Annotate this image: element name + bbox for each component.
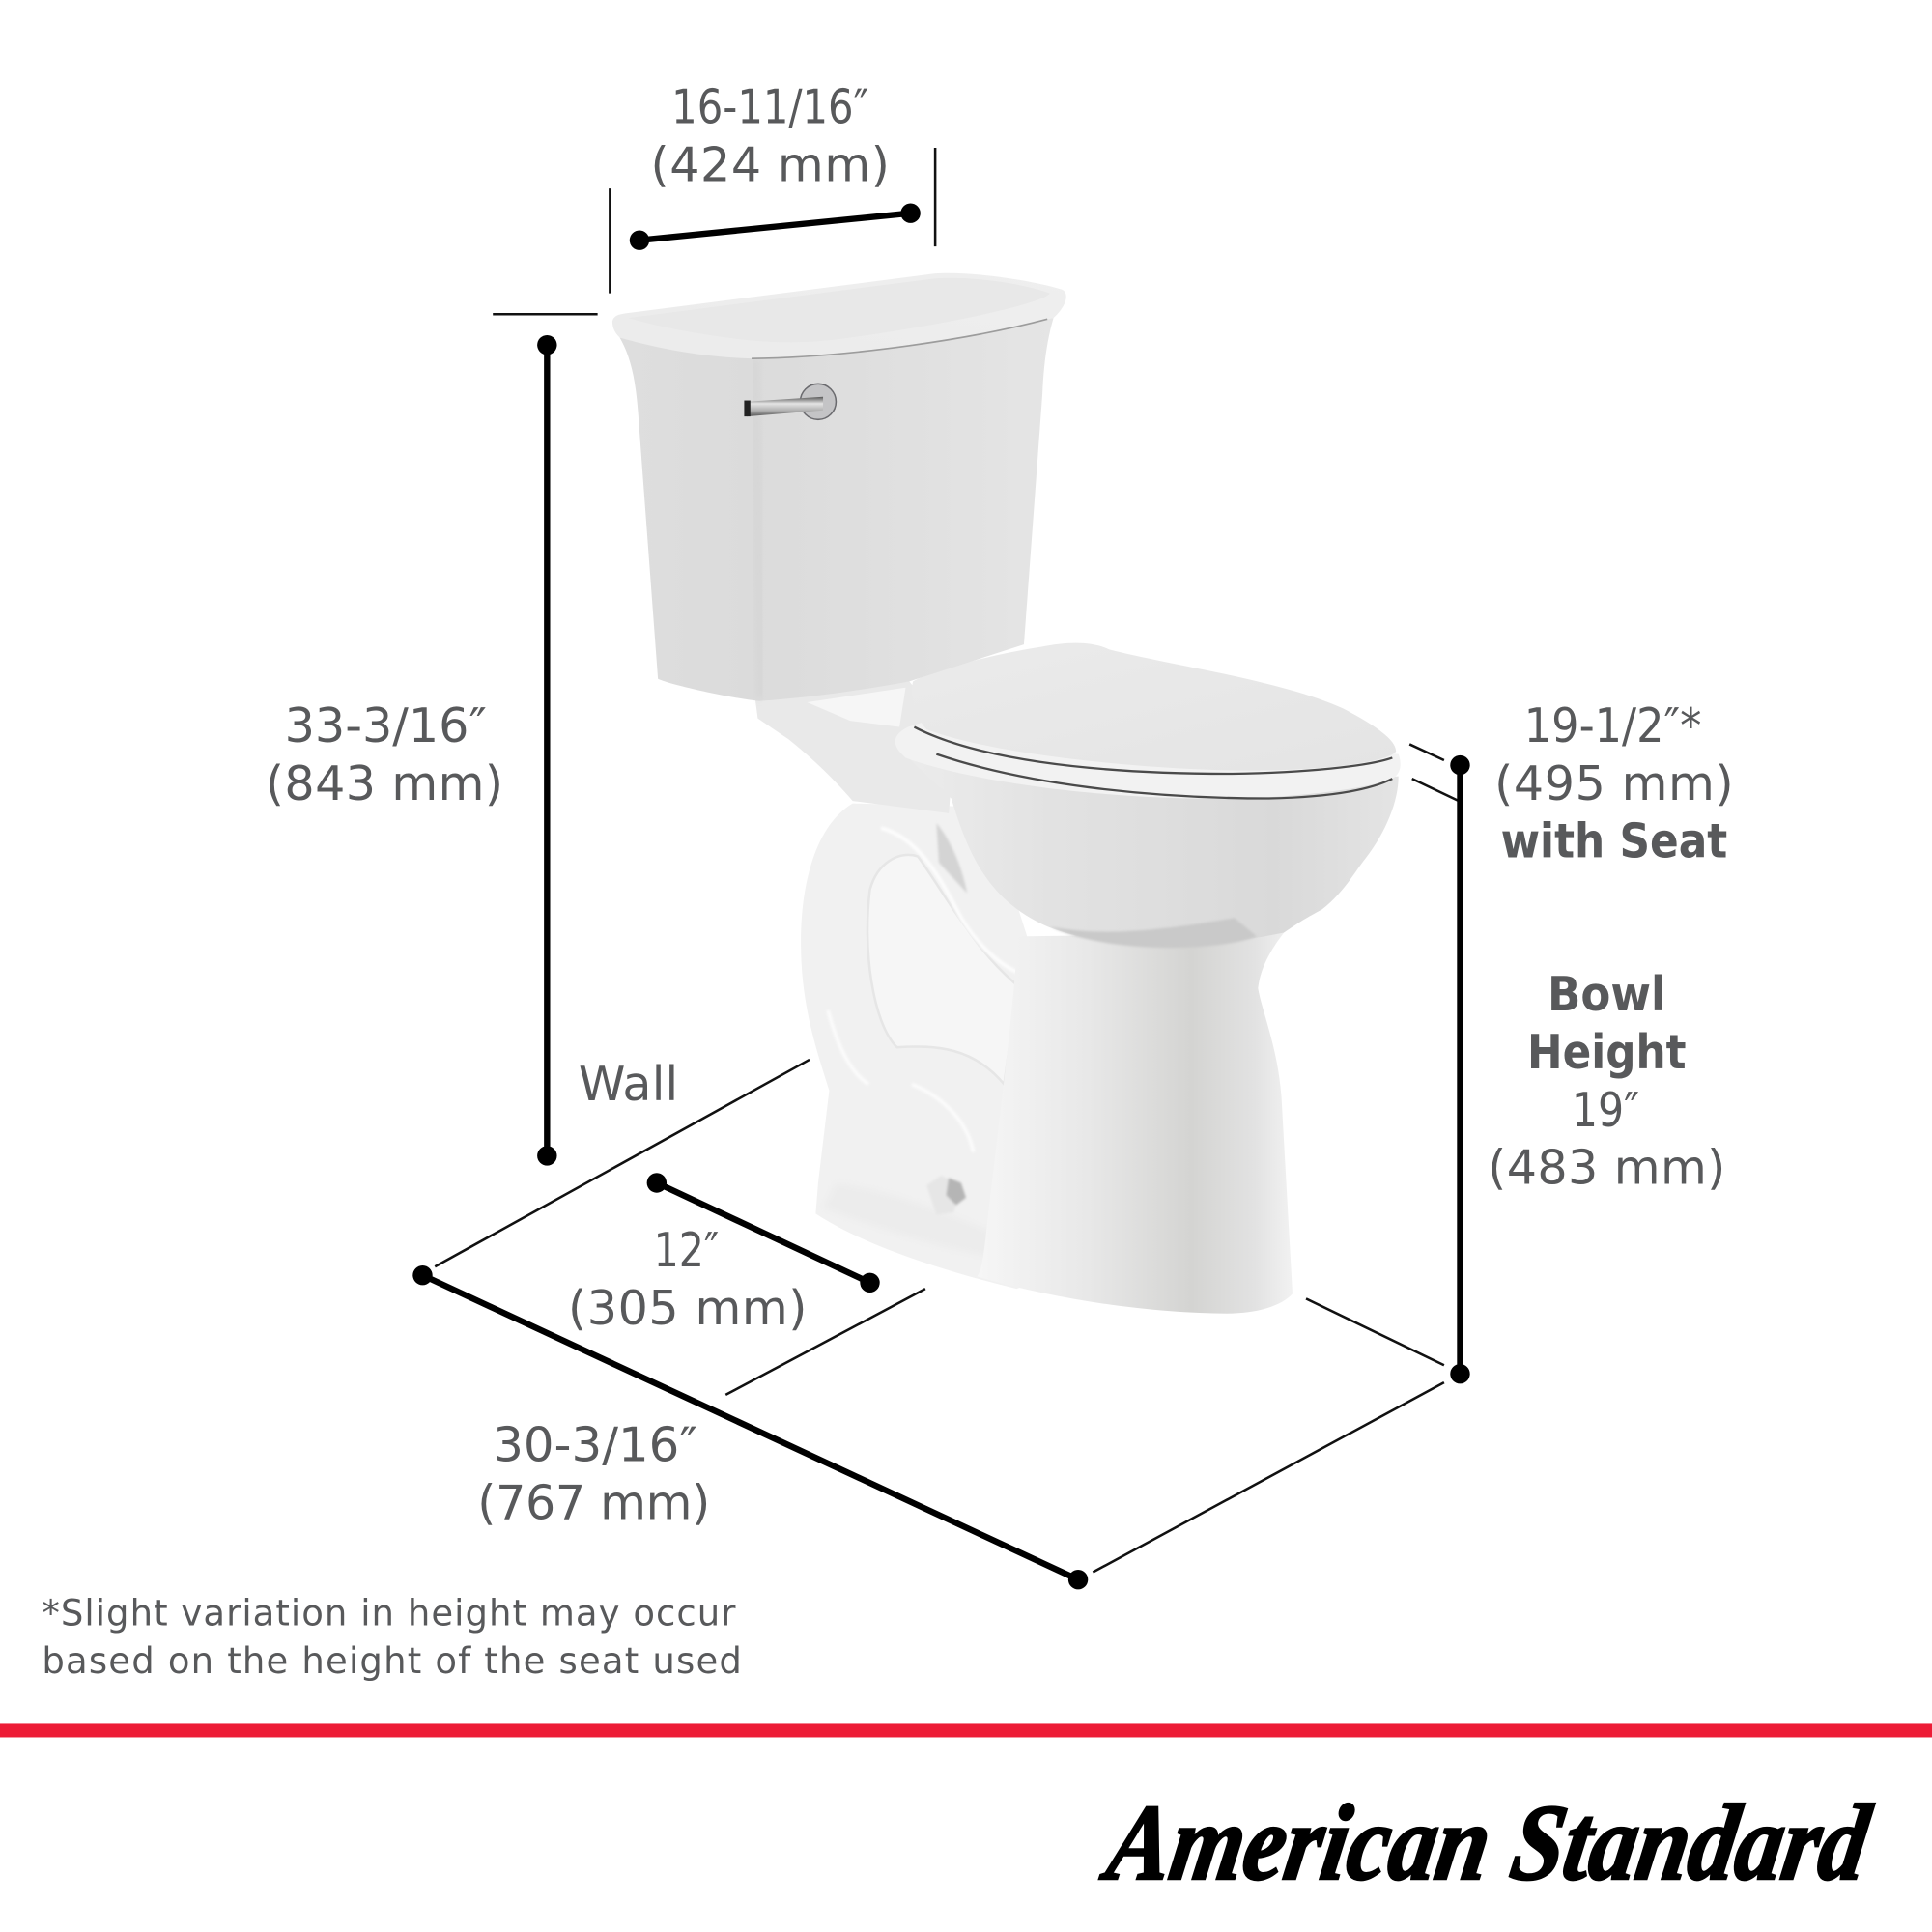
dimension: height with seat and bowl height: Height (1527, 1024, 1687, 1080)
footnote (42, 1592, 742, 1682)
toilet bowl (904, 754, 1399, 945)
dimension: overall height: (843 mm) (266, 755, 503, 811)
seat gap lines (914, 727, 1392, 799)
dimension: overall depth: 30-3/16″ (493, 1417, 697, 1473)
dimension: overall height: 33-3/16″ (285, 697, 487, 753)
dimension: overall depth (412, 1265, 1444, 1589)
dimension: tank width: (424 mm) (650, 136, 890, 192)
dimension: rough-in: 12″ (654, 1222, 719, 1278)
dimension: height with seat and bowl height: 19-1/2″* (1524, 697, 1701, 753)
dimension: height with seat and bowl height: (483 mm) (1488, 1140, 1725, 1196)
tank lid shadow line (752, 319, 1047, 358)
dimension: height with seat and bowl height: with Seat (1501, 813, 1727, 869)
dimension: tank width (610, 79, 935, 294)
wall label and line (435, 1056, 810, 1266)
tank lid (612, 273, 1066, 358)
dimension: rough-in (568, 1173, 925, 1395)
seat ring (895, 702, 1401, 799)
dimension: height with seat and bowl height: (495 mm) (1494, 755, 1734, 811)
footnote: *Slight variation in height may occur (42, 1592, 736, 1634)
dimension: height with seat and bowl height (1409, 697, 1734, 1383)
toilet neck and deck under tank (755, 681, 955, 813)
dimension: height with seat and bowl height: Bowl (1548, 966, 1665, 1022)
bowl underside highlight (1050, 918, 1257, 948)
dimension: rough-in: (305 mm) (568, 1280, 807, 1336)
deck highlight (807, 688, 906, 727)
tank body (620, 318, 1054, 701)
toilet rear trapway (801, 804, 1109, 1289)
flush lever (744, 384, 836, 419)
dimension: overall depth: (767 mm) (477, 1475, 710, 1531)
seat lid (912, 643, 1396, 771)
dimension: overall height (266, 314, 598, 1166)
toilet illustration (612, 273, 1401, 1314)
toilet pedestal (977, 933, 1293, 1314)
dimension: tank width: 16-11/16″ (671, 79, 868, 135)
red divider bar (0, 1723, 1932, 1737)
wall label and line: Wall (579, 1056, 678, 1112)
dimension: height with seat and bowl height: 19″ (1572, 1082, 1639, 1138)
tank corner shade (754, 359, 761, 697)
tank lid top surface (629, 278, 1050, 342)
footnote: based on the height of the seat used (42, 1640, 742, 1682)
